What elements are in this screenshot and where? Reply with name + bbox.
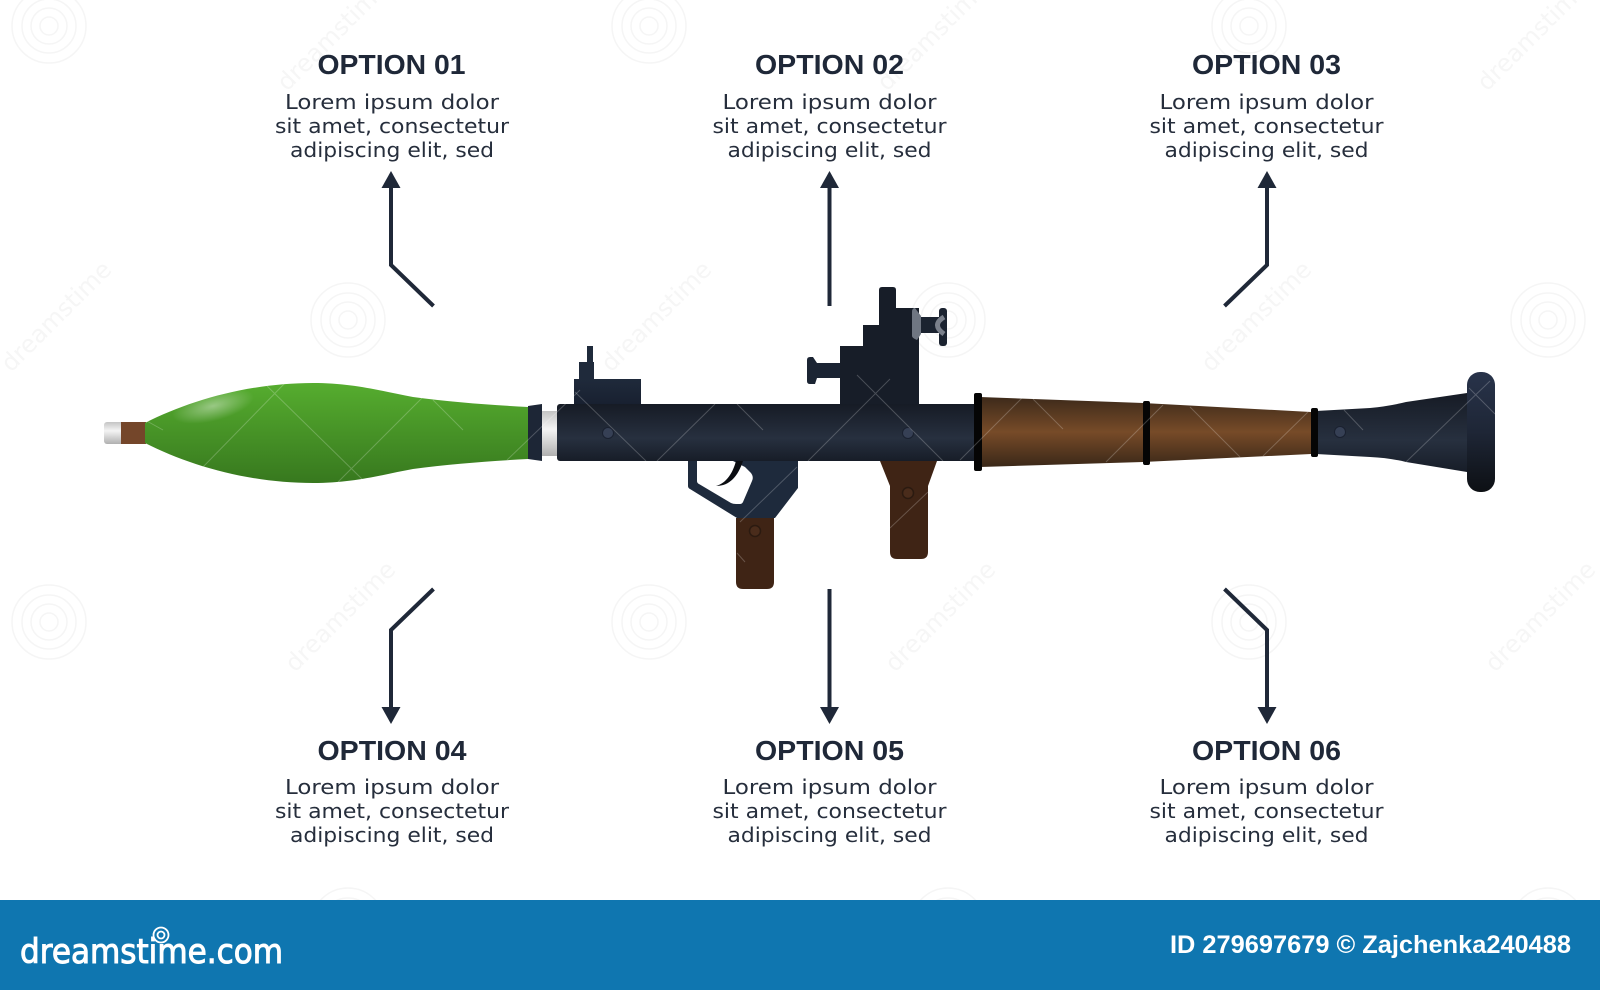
text block: option 02: sit amet, consectetur <box>712 114 947 138</box>
rear screw <box>1334 426 1346 438</box>
watermark pattern: dreamstime <box>879 555 1001 677</box>
text block: option 02 <box>712 90 947 162</box>
text block: option 05: Lorem ipsum dolor <box>722 775 937 799</box>
text block: option 03: sit amet, consectetur <box>1150 114 1384 138</box>
trigger guard <box>688 461 798 518</box>
option 02 <box>712 49 947 306</box>
text block: option 04: Lorem ipsum dolor <box>285 775 500 799</box>
venturi cap <box>1467 372 1495 492</box>
front grip <box>880 461 937 559</box>
rocket launcher illustration <box>104 287 1495 589</box>
image id and credit: ID 279697679 © Zajchenka240488 <box>1170 931 1571 959</box>
text block: option 03: adipiscing elit, sed <box>1164 138 1368 162</box>
trigger opening <box>697 461 753 504</box>
option 01 <box>275 49 510 306</box>
arrow: option 03 <box>1224 171 1276 306</box>
option 06 <box>1150 589 1384 847</box>
heading: option 03: OPTION 03 <box>1192 49 1341 80</box>
text block: option 06: adipiscing elit, sed <box>1164 823 1368 847</box>
watermark pattern: dreamstime <box>279 555 401 677</box>
front sight <box>574 346 641 405</box>
footer banner <box>0 900 1600 990</box>
text block: option 02: Lorem ipsum dolor <box>722 90 937 114</box>
arrow: option 04 <box>382 589 434 724</box>
icon: logo swirl <box>154 928 168 942</box>
arrow: option 02 <box>820 171 839 306</box>
text block: option 06: sit amet, consectetur <box>1150 799 1384 823</box>
text block: option 03 <box>1150 90 1384 162</box>
wooden heat shield <box>980 397 1311 467</box>
text block: option 01: sit amet, consectetur <box>275 114 510 138</box>
logo text: dreamstime.com <box>20 932 283 972</box>
text block: option 02: adipiscing elit, sed <box>728 138 932 162</box>
option 04 <box>275 589 510 847</box>
green warhead <box>145 381 528 483</box>
text block: option 05 <box>712 775 947 847</box>
text block: option 05: sit amet, consectetur <box>712 799 947 823</box>
rear sight <box>807 287 947 405</box>
warhead tip <box>104 422 146 444</box>
black bands <box>974 393 1318 471</box>
rear grip <box>736 518 774 589</box>
text block: option 04: adipiscing elit, sed <box>290 823 494 847</box>
heading: option 05: OPTION 05 <box>755 735 904 766</box>
text block: option 04 <box>275 775 510 847</box>
watermark pattern: dreamstime <box>1479 555 1600 677</box>
watermark lines over illustration <box>145 375 1495 562</box>
arrow: option 05 <box>820 589 839 724</box>
heading: option 02: OPTION 02 <box>755 49 904 80</box>
launch tube <box>557 404 977 461</box>
text block: option 01: adipiscing elit, sed <box>290 138 494 162</box>
text block: option 06 <box>1150 775 1384 847</box>
tube screws <box>602 428 914 438</box>
option 03 <box>1150 49 1384 306</box>
text block: option 01: Lorem ipsum dolor <box>285 90 500 114</box>
trigger <box>716 461 743 486</box>
text block: option 06: Lorem ipsum dolor <box>1160 775 1374 799</box>
arrow: option 01 <box>382 171 434 306</box>
watermark pattern: dreamstime <box>1195 255 1317 377</box>
warhead collar <box>528 404 558 461</box>
watermark pattern: dreamstime <box>595 255 717 377</box>
heading: option 04: OPTION 04 <box>318 735 467 766</box>
rear cone <box>1316 393 1467 472</box>
heading: option 06: OPTION 06 <box>1192 735 1341 766</box>
arrow: option 06 <box>1224 589 1276 724</box>
text block: option 04: sit amet, consectetur <box>275 799 510 823</box>
text block: option 01 <box>275 90 510 162</box>
text block: option 03: Lorem ipsum dolor <box>1160 90 1374 114</box>
heading: option 01: OPTION 01 <box>318 49 466 80</box>
option 05 <box>712 589 947 847</box>
text block: option 05: adipiscing elit, sed <box>728 823 932 847</box>
